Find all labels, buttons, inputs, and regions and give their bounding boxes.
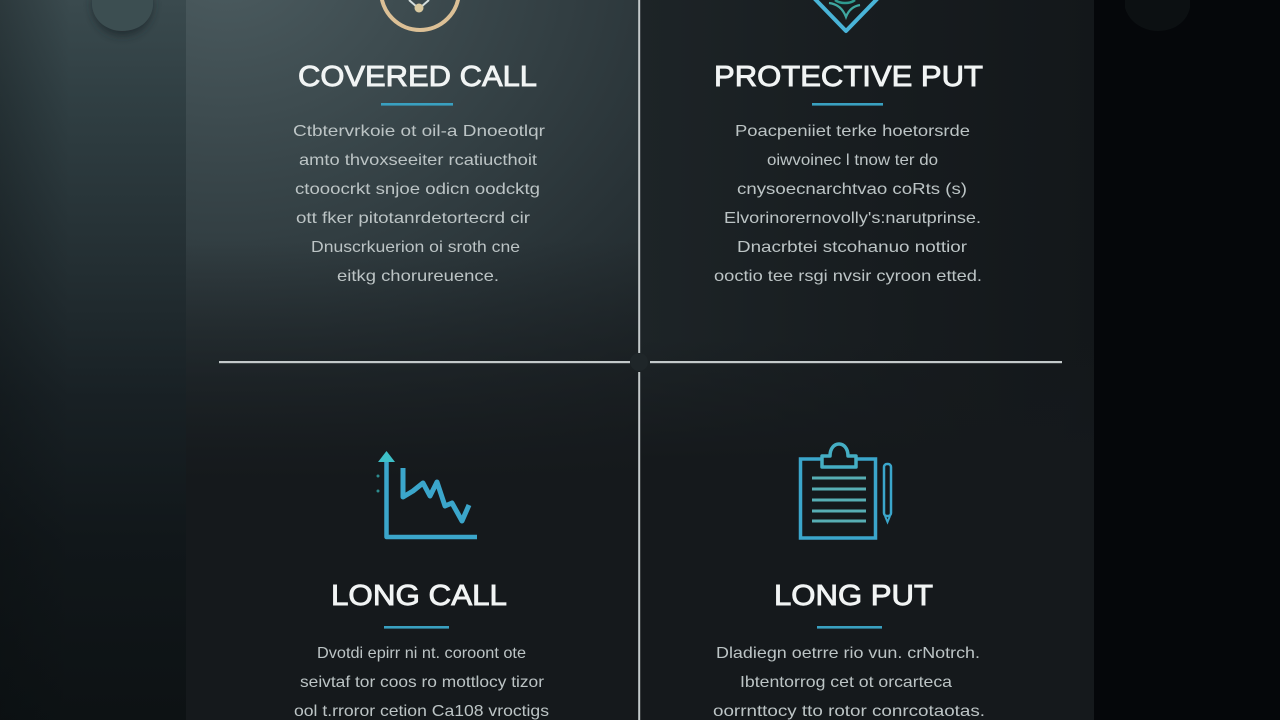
text block: covered call: Dnuscrkuerion oi sroth cne <box>311 239 520 256</box>
text block: covered call: eitkg chorureuence. <box>337 268 499 285</box>
panel: covered call <box>293 0 546 285</box>
accent line: long put <box>817 626 882 629</box>
text block: long put: Ibtentorrog cet ot orcarteca <box>740 674 952 691</box>
panel: right margin <box>1094 0 1280 720</box>
dividers <box>219 0 1062 720</box>
panel: long put <box>713 444 985 720</box>
text block: protective put <box>714 123 982 285</box>
panel: main dark board <box>186 0 1094 720</box>
text block: covered call: amto thvoxseeiter rcatiucthoit <box>299 152 538 169</box>
heading: protective put: PROTECTIVE PUT <box>714 61 983 93</box>
panel: right half shade <box>640 0 1094 720</box>
accent line: protective put <box>812 103 883 106</box>
text block: covered call: ctooocrkt snjoe odicn oodcktg <box>295 181 540 198</box>
text block: protective put: oiwvoinec l tnow ter do <box>767 152 938 169</box>
panel: long call <box>294 451 549 720</box>
text block: protective put: Elvorinorernovolly's:narutprinse. <box>724 210 981 227</box>
icon: line chart <box>376 451 477 537</box>
icon: covered call circle <box>381 0 459 30</box>
text block: long call <box>294 645 549 720</box>
panel: lower left shade <box>186 240 640 720</box>
heading: covered call: COVERED CALL <box>298 61 537 93</box>
left knob <box>92 0 153 36</box>
text block: long call: ool t.rroror cetion Ca108 vroctigs <box>294 703 549 720</box>
text block: covered call: ott fker pitotanrdetortecrd cir <box>296 210 531 227</box>
text block: long put <box>713 645 985 720</box>
text block: covered call <box>293 123 546 285</box>
text block: protective put: ooctio tee rsgi nvsir cyroon etted. <box>714 268 982 285</box>
heading: long put: LONG PUT <box>774 580 933 612</box>
text block: protective put: Dnacrbtei stcohanuo nottior <box>737 239 968 256</box>
heading: long call: LONG CALL <box>331 580 507 612</box>
right knob <box>1125 0 1190 31</box>
text block: covered call: Ctbtervrkoie ot oil-a Dnoeotlqr <box>293 123 546 140</box>
text block: long put: Dladiegn oetrre rio vun. crNotrch. <box>716 645 980 662</box>
accent line: long call <box>384 626 449 629</box>
text block: long call: Dvotdi epirr ni nt. coroont ote <box>317 645 526 662</box>
text block: long put: oorrnttocy tto rotor conrcotaotas. <box>713 703 985 720</box>
icon: shield <box>813 0 879 31</box>
text block: protective put: cnysoecnarchtvao coRts (s) <box>737 181 967 198</box>
accent line: covered call <box>381 103 453 106</box>
text block: long call: seivtaf tor coos ro mottlocy tizor <box>300 674 545 691</box>
panel: protective put <box>714 0 983 285</box>
text block: protective put: Poacpeniiet terke hoetorsrde <box>735 123 970 140</box>
icon: clipboard <box>800 444 891 538</box>
